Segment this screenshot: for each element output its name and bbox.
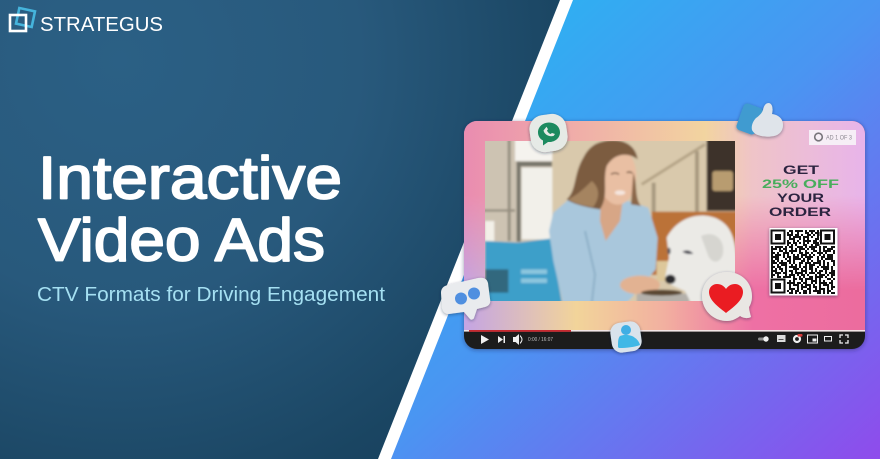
title: Interactive — [38, 144, 342, 212]
offer text: 25% OFF — [762, 177, 839, 191]
background: right gradient — [370, 0, 880, 459]
video player mockup — [464, 121, 865, 349]
icon: subtitles — [777, 335, 786, 342]
subtitle: CTV Formats for Driving Engagement — [37, 283, 385, 306]
logo — [10, 8, 163, 36]
icon: play — [481, 335, 489, 344]
time label: 0:00 / 16:07 — [528, 337, 553, 343]
icon: user profile badge — [609, 320, 643, 354]
offer text — [762, 163, 839, 219]
title — [38, 144, 342, 274]
ad counter badge — [809, 130, 856, 145]
title: Video Ads — [38, 206, 325, 274]
player panel — [464, 121, 865, 349]
icon: settings — [794, 334, 802, 342]
diagonal white stripe — [378, 0, 573, 459]
player controls — [481, 334, 848, 345]
icon: heart bubble — [702, 272, 752, 321]
QR code — [770, 228, 838, 296]
icon: fullscreen — [840, 335, 848, 343]
icon: theater — [824, 336, 832, 341]
icon: chat bubble with dots — [441, 278, 490, 320]
icon: thumbs up — [735, 102, 783, 137]
offer text: GET — [783, 163, 820, 177]
icon: volume — [513, 334, 522, 345]
progress bar — [464, 330, 865, 332]
icon: next — [498, 336, 505, 343]
icon: autoplay toggle — [758, 336, 769, 342]
icon: whatsapp chat bubble — [528, 112, 569, 154]
offer text: ORDER — [769, 205, 831, 219]
logo wordmark: STRATEGUS — [40, 13, 163, 36]
offer text: YOUR — [777, 191, 824, 205]
logo mark — [10, 8, 35, 31]
video photo: woman feeding dog — [485, 141, 735, 301]
icon: miniplayer — [808, 335, 818, 343]
ad counter badge: AD 1 OF 3 — [826, 134, 852, 142]
background: left navy panel — [0, 0, 561, 459]
